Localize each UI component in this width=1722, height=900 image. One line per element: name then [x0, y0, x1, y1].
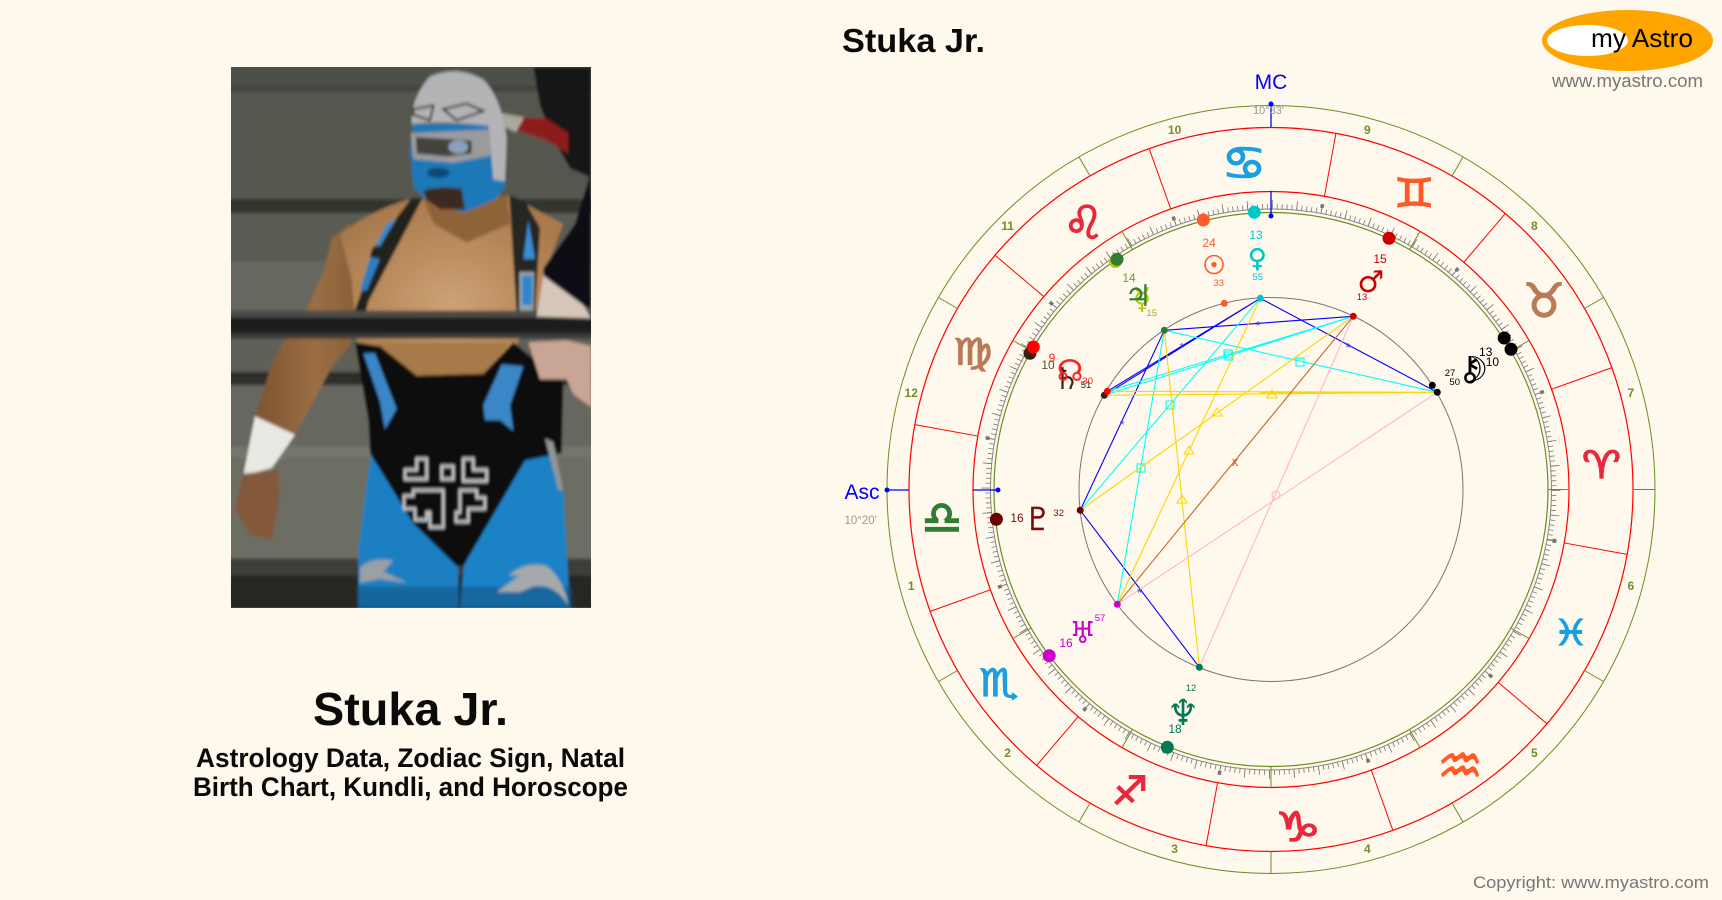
chest emblem [404, 459, 487, 527]
left subtitle: Birth Chart, Kundli, and Horoscope [193, 772, 628, 802]
website url: www.myastro.com [1551, 71, 1703, 91]
planet: neptune: ♆ [1167, 693, 1199, 734]
zodiac signs: ♉︎ [1523, 274, 1565, 329]
house numbers [905, 123, 1634, 856]
planet: chiron and moon: 27 [1445, 368, 1455, 379]
logo [1542, 10, 1713, 71]
planet: sun [1202, 236, 1226, 289]
midheaven marker: MC [1255, 71, 1287, 94]
zodiac signs: ♍︎ [953, 332, 993, 374]
outer planet markers [990, 206, 1518, 754]
hair and glove top right [533, 67, 591, 178]
zodiac signs: ♊︎ [1394, 170, 1434, 217]
planet: node and saturn: 10 [1041, 358, 1055, 372]
house numbers: 12 [905, 386, 918, 400]
planet: venus: ♀ [1248, 244, 1267, 274]
planet: chiron and moon [1445, 345, 1499, 390]
house numbers: 3 [1171, 842, 1178, 856]
zodiac signs: ♏︎ [979, 661, 1019, 705]
house numbers: 1 [908, 579, 915, 593]
house numbers: 7 [1627, 386, 1634, 400]
aspect sextile marks [1119, 318, 1351, 600]
house numbers: 2 [1004, 746, 1011, 760]
arm [255, 224, 357, 435]
mask [410, 124, 505, 213]
zodiac signs: ♎︎ [922, 491, 962, 545]
planet: chiron and moon: 50 [1449, 377, 1460, 388]
copyright: Copyright: www.myastro.com [1473, 873, 1709, 892]
zodiac signs: ♋︎ [1222, 137, 1266, 190]
house numbers: 9 [1364, 123, 1371, 137]
ascendant marker: Asc [844, 481, 880, 504]
tights [358, 453, 458, 608]
planet: chiron and moon: 13 [1479, 345, 1493, 359]
zodiac signs: ♈︎ [1582, 443, 1621, 487]
planet: uranus: 57 [1095, 613, 1105, 624]
aspect sextile marks: * [1179, 340, 1185, 355]
planet: pluto: ♇ [1024, 500, 1052, 538]
planet: sun: 24 [1202, 236, 1216, 250]
natal chart wheel [844, 71, 1655, 874]
house numbers: 10 [1168, 123, 1182, 137]
planet: mercury and jupiter: 15 [1146, 308, 1157, 319]
planet: mercury and jupiter: ☿ [1133, 282, 1151, 317]
rope [231, 314, 591, 336]
planet: node and saturn: 9 [1049, 351, 1056, 365]
aspect sextile marks: * [1255, 318, 1261, 333]
planet: chiron and moon: ⚷ [1458, 349, 1482, 389]
planet: venus: 13 [1249, 228, 1263, 242]
planet: pluto: 16 [1010, 511, 1024, 525]
torso [340, 196, 563, 376]
planet: venus: 55 [1252, 272, 1263, 283]
planet: node and saturn: 51 [1081, 380, 1091, 391]
planet: mars: ♂ [1357, 265, 1384, 300]
ascendant marker [844, 481, 1000, 527]
zodiac signs: ♌︎ [1063, 197, 1104, 250]
rings [887, 106, 1655, 874]
right person sleeve and hands [543, 172, 591, 309]
house numbers: 11 [1001, 219, 1014, 233]
zodiac signs: ♓︎ [1553, 612, 1589, 654]
planet: mars: 15 [1373, 252, 1387, 266]
planet: mars: 13 [1357, 292, 1367, 303]
house numbers: 6 [1627, 579, 1634, 593]
planet: node and saturn [1041, 351, 1093, 397]
planet: node and saturn: ☊ [1057, 354, 1083, 389]
planet: pluto: 32 [1053, 508, 1064, 519]
planet: chiron and moon: 10 [1486, 355, 1499, 369]
suit [355, 342, 563, 566]
planet: node and saturn: ♄ [1053, 362, 1080, 397]
planet: uranus [1059, 613, 1105, 651]
planet: uranus: 16 [1059, 636, 1073, 650]
planet: venus [1248, 228, 1267, 283]
planet: sun: 33 [1213, 278, 1224, 289]
planet: chiron and moon: ☽ [1458, 350, 1488, 390]
aspect sextile marks: * [1345, 340, 1351, 355]
zodiac signs: ♒︎ [1437, 733, 1483, 799]
midheaven marker: 10°33' [1253, 105, 1284, 117]
planet: neptune: 12 [1186, 683, 1196, 694]
sign boundaries [915, 133, 1627, 846]
planet: mars [1357, 252, 1387, 303]
inner planet points [1077, 295, 1441, 671]
planet: mercury and jupiter [1122, 271, 1157, 319]
planet: pluto [1010, 500, 1064, 538]
left title: Stuka Jr. [313, 683, 508, 735]
house numbers: 8 [1531, 219, 1538, 233]
left subtitle [193, 743, 628, 802]
planet: mercury and jupiter: ♃ [1125, 279, 1151, 314]
logo: my Astro [1591, 23, 1693, 53]
aspect lines [1080, 298, 1437, 667]
straps [354, 198, 423, 315]
aspect sextile marks: * [1119, 417, 1125, 432]
house cusps [938, 157, 1655, 873]
house numbers: 4 [1364, 842, 1371, 856]
zodiac signs [922, 137, 1621, 851]
planet: neptune: 18 [1168, 722, 1182, 736]
left subtitle: Astrology Data, Zodiac Sign, Natal [196, 743, 625, 773]
house numbers: 5 [1531, 746, 1538, 760]
planet: sun: ☉ [1202, 251, 1226, 281]
planet: node and saturn: 30 [1082, 376, 1093, 387]
zodiac signs: ♐︎ [1112, 769, 1148, 814]
chart title: Stuka Jr. [842, 22, 985, 59]
planet: mercury and jupiter: 14 [1122, 271, 1136, 285]
photo: masked wrestler in blue and black [220, 57, 603, 620]
leg dolphins [360, 560, 407, 583]
ascendant marker: 10°20' [844, 515, 877, 527]
aspect sextile marks: * [1137, 585, 1142, 600]
zodiac signs: ♑︎ [1275, 803, 1321, 851]
planet: uranus: ♅ [1069, 616, 1096, 651]
aspect sextile marks: x [1232, 454, 1239, 469]
midheaven marker [1253, 71, 1287, 218]
